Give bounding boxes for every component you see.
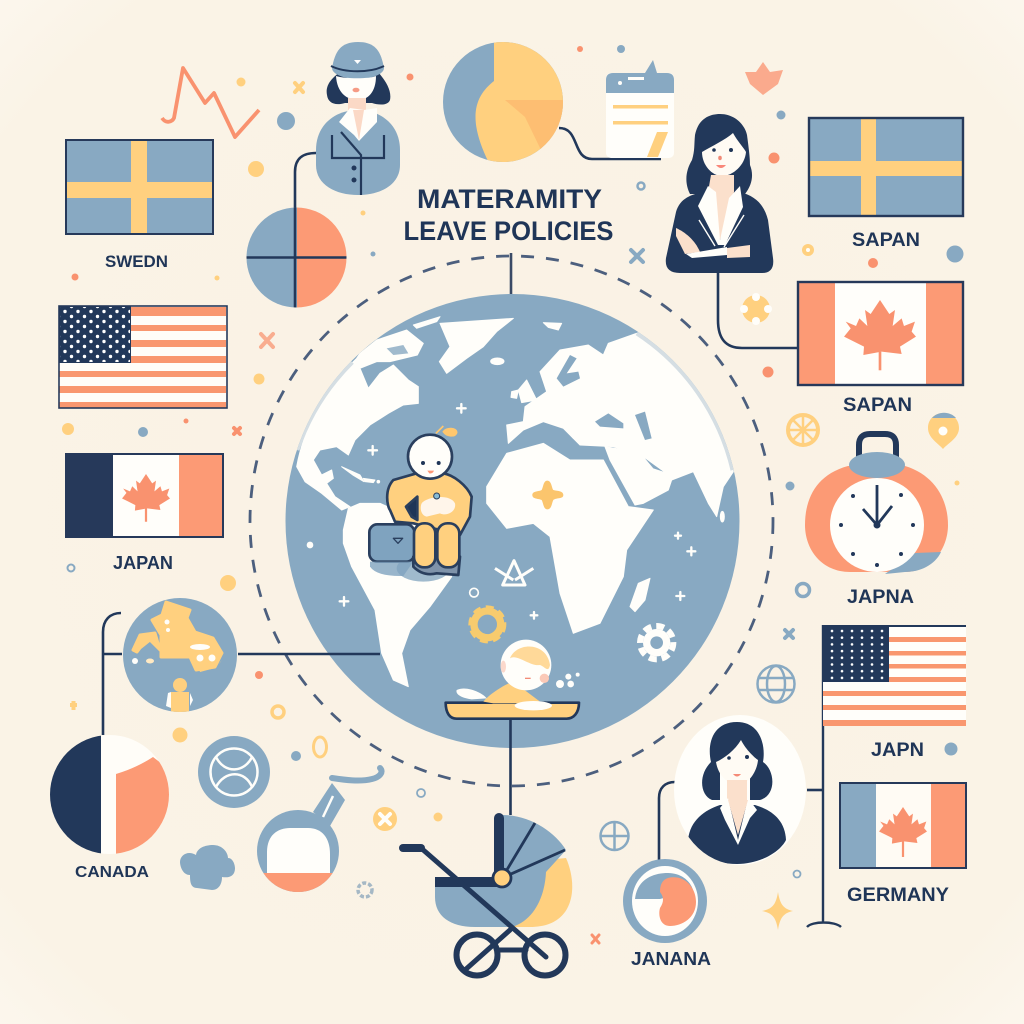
- cloud icon: [180, 845, 235, 890]
- zigzag trend line: [162, 68, 259, 137]
- label: Japn: JAPN: [871, 740, 924, 761]
- dashed orbit around the globe: [250, 256, 773, 786]
- flag: Sweden right: [809, 118, 963, 216]
- title: [404, 184, 614, 246]
- baby lying on a tray: [446, 640, 580, 719]
- label: Janana: JANANA: [631, 949, 711, 969]
- flag: tricolor Germany: [840, 783, 966, 868]
- flag: USA left: [59, 306, 227, 408]
- flask icon: [255, 768, 382, 897]
- flag: Canada right: [798, 282, 963, 385]
- woman portrait circle: [674, 715, 806, 865]
- title: MATERAMITY: [417, 184, 602, 214]
- quadrant pie chart: [246, 207, 348, 308]
- map circle with yellow figures: [123, 598, 237, 712]
- globe line icon circle: [198, 736, 270, 808]
- label: Sapan second: SAPAN: [843, 394, 912, 416]
- connector lines: [103, 128, 823, 860]
- flag: USA right: [823, 625, 966, 726]
- clock icon: [805, 434, 948, 574]
- label: Germany: GERMANY: [847, 885, 949, 906]
- stroller: [403, 813, 572, 976]
- label: Japna: JAPNA: [847, 587, 914, 608]
- pie chart top: [443, 40, 565, 165]
- label: Sapan top right: SAPAN: [852, 229, 920, 251]
- seated child with briefcase on the globe: [369, 426, 472, 582]
- globe: [286, 294, 740, 748]
- globe sparkles and gears: [307, 404, 695, 659]
- small decorative dots and glyphs: [62, 45, 964, 943]
- notepad icon: [606, 60, 674, 158]
- flight attendant figure: [316, 42, 400, 195]
- flag: Sweden left: [66, 140, 213, 234]
- flag: tricolor with maple leaf left: [66, 454, 223, 537]
- small pie medallion: [623, 859, 707, 943]
- title: LEAVE POLICIES: [404, 216, 614, 246]
- label: Canada: CANADA: [75, 864, 149, 881]
- label: Japan left: JAPAN: [113, 553, 173, 573]
- flagpole: [807, 625, 841, 927]
- businesswoman with crossed arms: [666, 114, 773, 273]
- label: Swedn: SWEDN: [105, 252, 168, 271]
- small tricolor pie circle left: [50, 735, 171, 855]
